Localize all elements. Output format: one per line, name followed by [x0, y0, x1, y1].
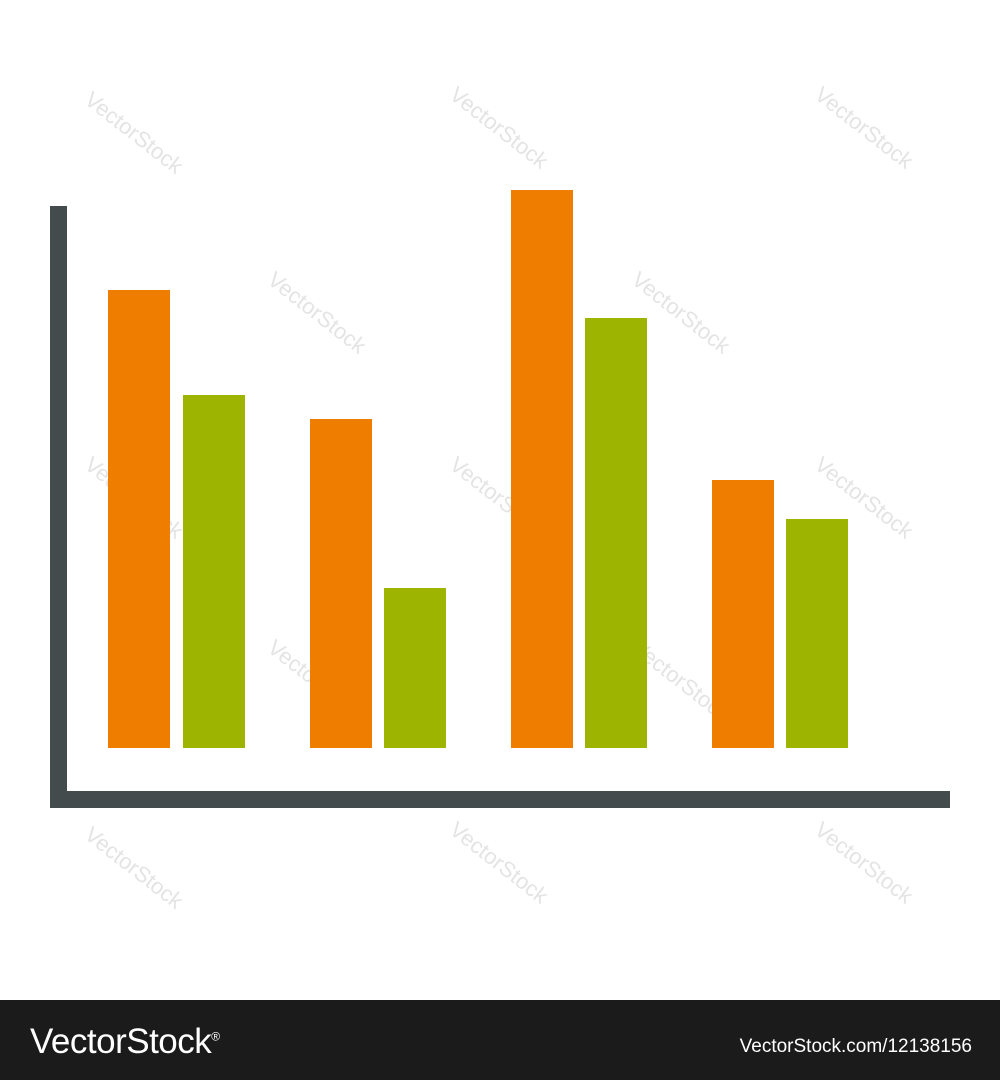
bar: group 3 orange [511, 190, 573, 748]
footer logo text: VectorStock® [30, 1022, 220, 1061]
bar: group 4 green [786, 519, 848, 748]
bar: group 4 orange [712, 480, 774, 748]
text: VectorStock [80, 87, 188, 179]
bar chart [50, 190, 950, 808]
x axis [50, 791, 950, 808]
text: VectorStock [263, 267, 371, 359]
footer url: VectorStock.com/12138156 [740, 1036, 972, 1057]
y axis [50, 206, 67, 808]
footer [0, 1000, 1000, 1080]
text: VectorStock [627, 267, 735, 359]
bar: group 2 green [384, 588, 446, 748]
text: VectorStock [445, 452, 553, 544]
bar: group 1 green [183, 395, 245, 748]
text: VectorStock [263, 635, 371, 727]
text: VectorStock [80, 822, 188, 914]
text: VectorStock [445, 817, 553, 909]
bar: group 2 orange [310, 419, 372, 748]
text: VectorStock [810, 82, 918, 174]
bar: group 3 green [585, 318, 647, 748]
bar: group 1 orange [108, 290, 170, 748]
text: VectorStock [445, 82, 553, 174]
text: VectorStock [80, 452, 188, 544]
text: VectorStock [810, 452, 918, 544]
text: VectorStock [627, 635, 735, 727]
text: VectorStock [810, 817, 918, 909]
